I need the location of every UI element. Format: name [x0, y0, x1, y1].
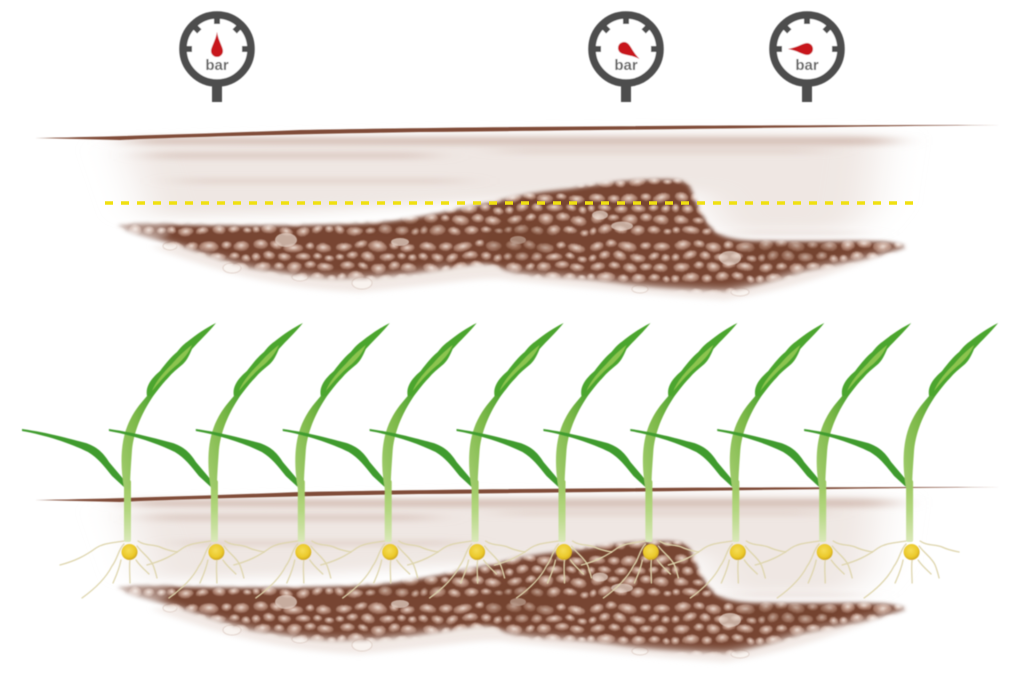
- upper soil profile with compacted layer: [35, 125, 1000, 305]
- seedling 10: [804, 323, 998, 598]
- seedling 6: [456, 323, 650, 598]
- seedling 9: [717, 323, 911, 598]
- seedling 3: [196, 323, 390, 598]
- gauge: medium pressure, needle left: [773, 15, 841, 102]
- seedling 7: [543, 323, 737, 598]
- needle: [788, 43, 813, 55]
- seedling 2: [109, 323, 303, 598]
- gauge unit: bar: [614, 57, 638, 74]
- lower soil profile with compacted layer: [35, 487, 1000, 667]
- seedling 8: [630, 323, 824, 598]
- yellow dashed measurement line: [105, 201, 918, 205]
- row of ten maize seedlings: [22, 323, 998, 598]
- needle: [616, 40, 643, 64]
- seedling 1: [22, 323, 216, 598]
- gauge unit: bar: [205, 57, 229, 74]
- gauge: high pressure, needle down-right: [592, 15, 660, 102]
- needle: [211, 32, 223, 57]
- seedling 5: [370, 323, 564, 598]
- seedling 4: [283, 323, 477, 598]
- gauge: low pressure, needle up: [183, 15, 251, 102]
- gauge unit: bar: [795, 57, 819, 74]
